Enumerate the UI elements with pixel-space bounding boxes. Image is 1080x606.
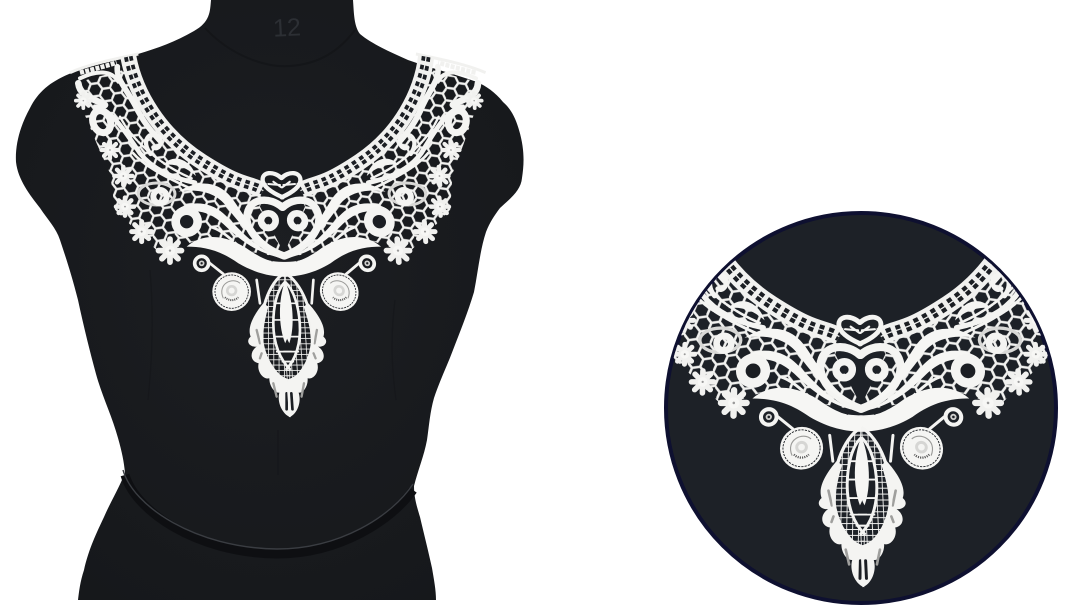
medallion disc <box>212 272 251 311</box>
pendant oval <box>261 273 293 383</box>
lace collar on mannequin <box>70 54 510 417</box>
zoom circle detail <box>664 211 1058 605</box>
neck size number: 12 <box>272 13 302 43</box>
scroll stripes <box>177 184 288 263</box>
waist ribbon <box>123 470 413 554</box>
mannequin torso <box>16 0 524 600</box>
pendant outer scallops <box>248 303 291 417</box>
lace flowers <box>76 93 181 262</box>
lace close-up <box>674 258 1048 588</box>
